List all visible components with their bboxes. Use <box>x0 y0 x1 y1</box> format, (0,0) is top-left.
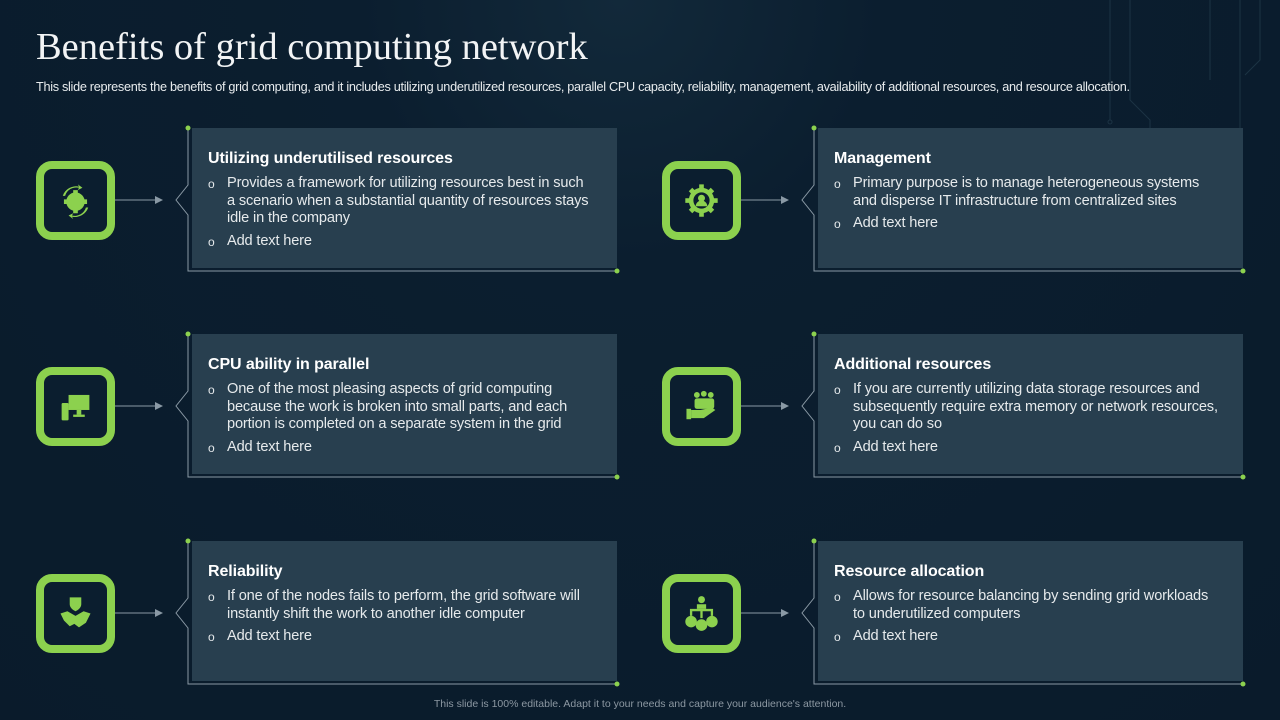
card text <box>818 541 1243 681</box>
card text <box>192 334 617 474</box>
card text: Add text here <box>227 439 312 455</box>
panel: management <box>662 126 1246 274</box>
card text: Utilizing underutilised resources <box>208 150 453 167</box>
icon: allocation tree <box>662 574 741 653</box>
card text: Reliability <box>208 563 282 580</box>
bracket <box>176 538 620 686</box>
card text: Additional resources <box>834 356 991 373</box>
footer note: This slide is 100% editable. Adapt it to your needs and capture your audience's attention. <box>434 698 846 710</box>
card text: Add text here <box>227 628 312 644</box>
card text <box>192 128 617 268</box>
subtitle: This slide represents the benefits of grid computing, and it includes utilizing underutilized resources, parallel CPU capacity, reliability, management, availability of additional resources, and resource allocation. <box>36 80 1130 94</box>
icon: gear person <box>662 161 741 240</box>
card text: and disperse IT infrastructure from centralized sites <box>853 193 1177 209</box>
arrow <box>115 402 163 410</box>
panel: additional resources <box>662 332 1246 480</box>
arrow <box>741 196 789 204</box>
card text: idle in the company <box>227 210 350 226</box>
card text: Add text here <box>853 215 938 231</box>
decorative circuit lines top right <box>1108 0 1260 128</box>
arrow <box>115 196 163 204</box>
bracket <box>176 332 620 480</box>
bracket <box>176 126 620 274</box>
card text: If one of the nodes fails to perform, the grid software will <box>227 588 580 604</box>
icon: gear with cycle <box>36 161 115 240</box>
bracket <box>802 332 1246 480</box>
title: Benefits of grid computing network <box>36 26 588 68</box>
card text: instantly shift the work to another idle computer <box>227 606 525 622</box>
card text: Add text here <box>853 439 938 455</box>
icon: hand with people <box>662 367 741 446</box>
card text: you can do so <box>853 416 942 432</box>
card text: Primary purpose is to manage heterogeneous systems <box>853 175 1199 191</box>
card text: Add text here <box>227 233 312 249</box>
icon: computer <box>36 367 115 446</box>
panel: reliability <box>36 538 620 686</box>
card text: to underutilized computers <box>853 606 1020 622</box>
card text: Provides a framework for utilizing resources best in such <box>227 175 583 191</box>
arrow <box>115 609 163 617</box>
card text: because the work is broken into small parts, and each <box>227 399 567 415</box>
panel: CPU ability in parallel <box>36 332 620 480</box>
arrow <box>741 402 789 410</box>
panel: resource allocation <box>662 538 1246 686</box>
card text: Add text here <box>853 628 938 644</box>
card text: subsequently require extra memory or network resources, <box>853 399 1218 415</box>
arrow <box>741 609 789 617</box>
card text: Management <box>834 150 931 167</box>
icon: shield handshake <box>36 574 115 653</box>
card text: One of the most pleasing aspects of grid computing <box>227 381 552 397</box>
card text: If you are currently utilizing data storage resources and <box>853 381 1200 397</box>
card text: CPU ability in parallel <box>208 356 369 373</box>
card text <box>192 541 617 681</box>
card text <box>818 334 1243 474</box>
bracket <box>802 126 1246 274</box>
card text: a scenario when a substantial quantity of resources stays <box>227 193 588 209</box>
card text: Allows for resource balancing by sending grid workloads <box>853 588 1208 604</box>
panel: utilizing underutilised resources <box>36 126 620 274</box>
bracket <box>802 538 1246 686</box>
card text <box>818 128 1243 268</box>
card text: portion is completed on a separate system in the grid <box>227 416 561 432</box>
card text: Resource allocation <box>834 563 984 580</box>
